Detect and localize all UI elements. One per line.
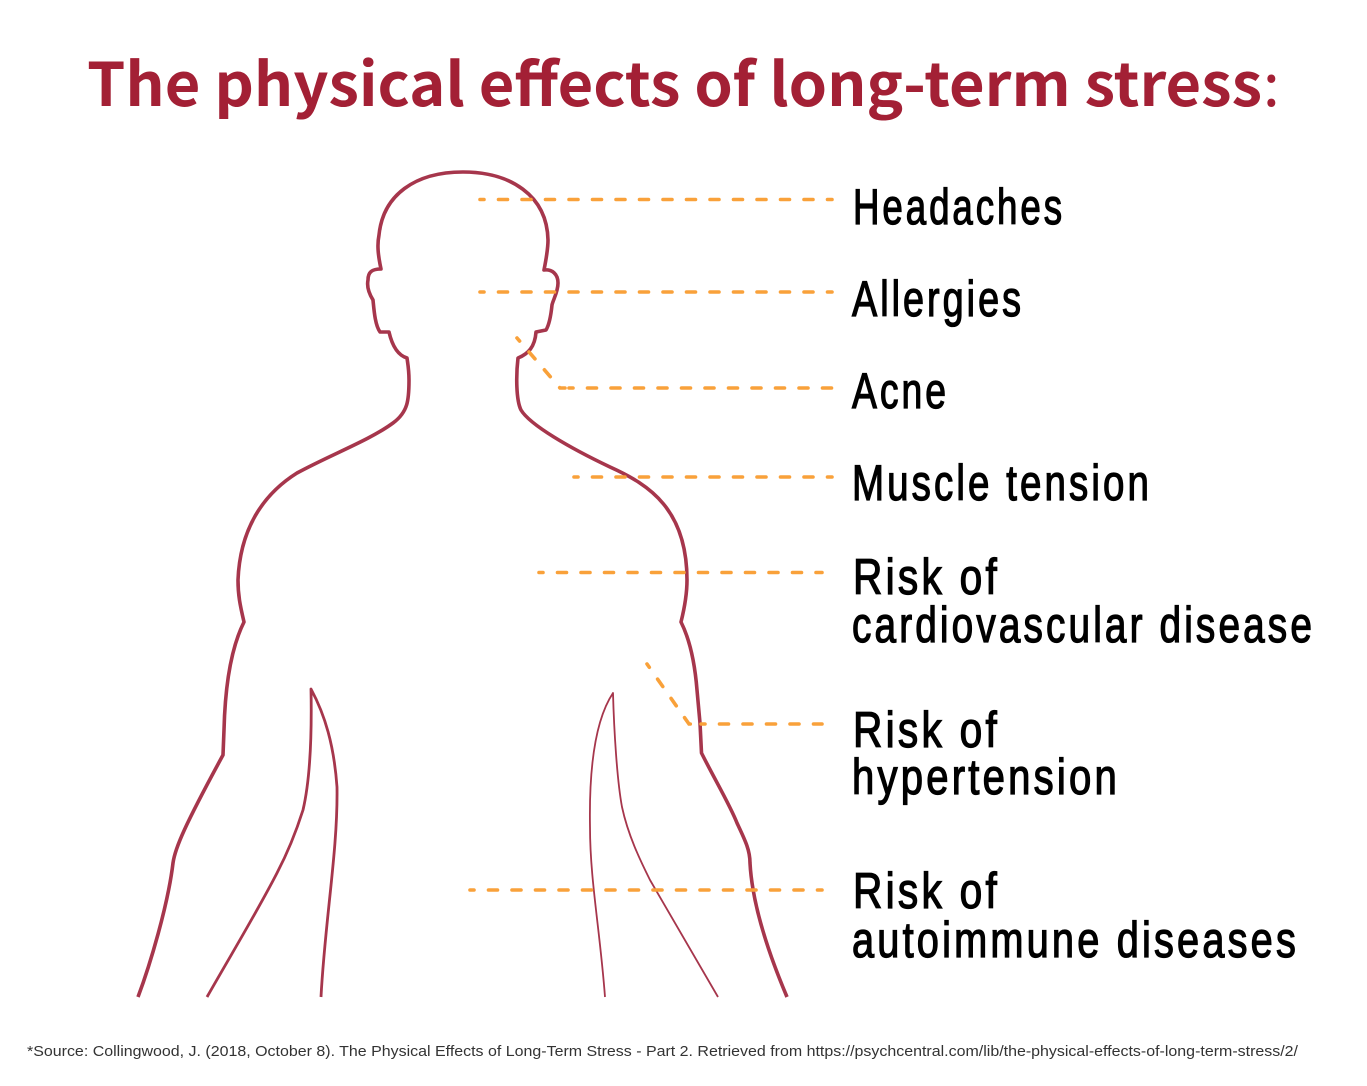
label: allergies: Allergies [852,271,1024,327]
pointer: acne [517,338,832,388]
label: risk of cardiovascular disease: Risk of [853,549,1000,605]
label: headaches: Headaches [853,179,1065,235]
title: : [1263,37,1280,124]
source note: *Source: Collingwood, J. (2018, October 8). The Physical Effects of Long-Term Stress - Part 2. Retrieved from https://psychcentral.com/lib/the-physical-effects-of-long-term-stress/2/ [27,1043,1299,1060]
label: risk of autoimmune diseases: Risk of [853,863,1000,919]
label: risk of hypertension [852,702,1120,805]
outer silhouette [138,172,787,997]
label: risk of autoimmune diseases [852,863,1299,968]
label: muscle tension: Muscle tension [852,455,1152,511]
pointer: autoimmune diseases [470,888,822,892]
label: risk of hypertension: Risk of [853,702,1000,758]
label: risk of cardiovascular disease [852,549,1315,653]
pointer: allergies [480,290,832,294]
body outline figure [138,172,787,997]
pointer: headaches [480,198,832,201]
inner left arm line [207,689,337,997]
inner right arm line [590,693,718,997]
pointer: hypertension [647,664,822,724]
label: risk of hypertension: hypertension [852,749,1120,805]
title: The physical effects of long-term stress [87,37,1262,124]
pointer: cardiovascular disease [539,571,822,574]
pointer: muscle tension [574,475,832,479]
label: acne: Acne [852,363,949,419]
